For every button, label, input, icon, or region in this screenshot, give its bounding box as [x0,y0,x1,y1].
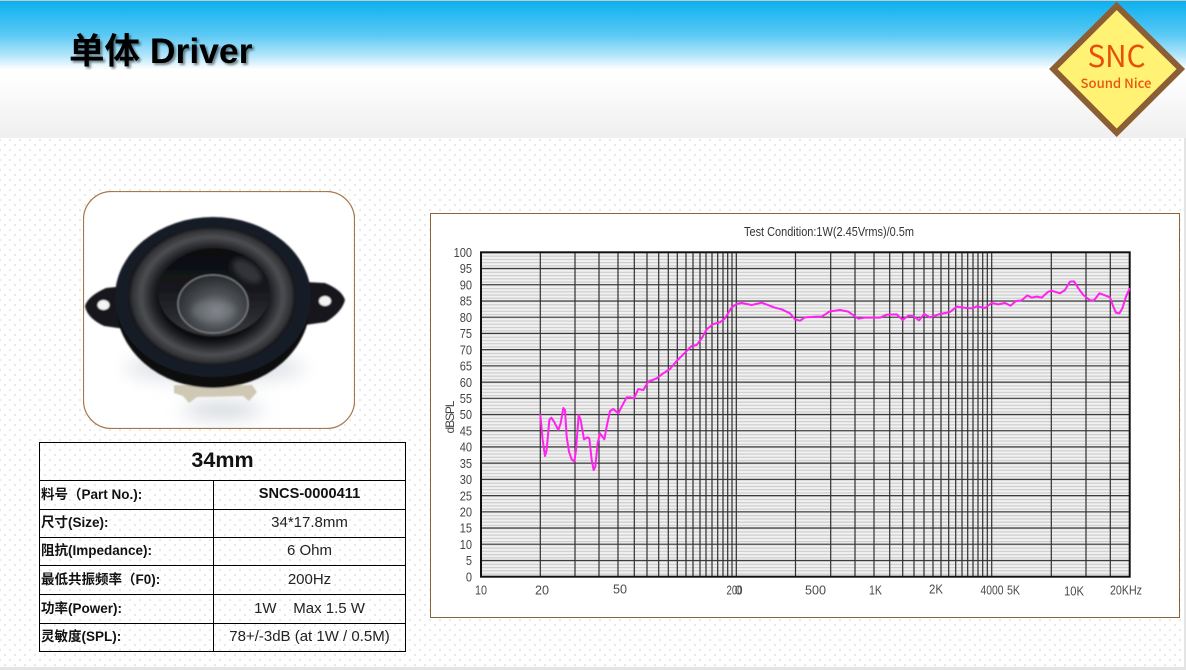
row: part number [41,486,360,502]
row: power: 1W Max 1.5 W [254,600,365,616]
x axis labels: 20KHz [1110,582,1142,598]
row: power: 功率(Power): [41,600,122,616]
y axis labels: 0 [466,570,472,585]
table heading [41,448,390,645]
row: sensitivity [41,628,390,645]
x axis labels: 1K [869,582,882,598]
y axis labels: 35 [460,456,472,471]
row: resonance: 200Hz [288,570,331,588]
table heading: 34mm [191,448,254,472]
row: power [41,600,365,616]
row: resonance: 最低共振频率（F0): [41,572,160,586]
y axis labels: 60 [460,375,472,390]
header band [0,0,1186,138]
row: part number: 料号（Part No.): [41,486,142,502]
y axis labels: 75 [460,326,472,341]
y axis labels: 95 [460,261,472,276]
logo: SNC Sound Nice [1049,2,1185,137]
row: part number: SNCS-0000411 [259,486,360,502]
y axis labels: 20 [460,505,472,520]
y axis labels: 5 [466,553,472,568]
y axis labels: 10 [460,537,472,552]
y axis labels: 65 [460,359,472,374]
row: sensitivity: 灵敏度(SPL): [41,629,121,644]
x axis labels: 2K [929,582,943,596]
photo panel: speaker driver [83,191,355,429]
x axis labels [475,582,1142,598]
logo: SNC Sound Nice: SNC [1088,32,1146,76]
x axis labels: 20 [535,582,549,598]
title: 单体 Driver [69,31,252,71]
spec table [39,442,406,652]
x axis labels: 5K [1007,582,1020,598]
y axis labels: 85 [460,294,472,309]
row: impedance: 6 Ohm [287,542,332,559]
row: size: 34*17.8mm [271,514,348,531]
y axis labels: 15 [460,521,472,536]
row: resonance [41,570,331,588]
y axis labels: 55 [460,391,472,406]
plot grid [481,252,1130,577]
x axis labels: 10K [1064,584,1084,598]
x axis labels: 50 [613,582,627,596]
y axis labels: 40 [460,440,472,455]
x axis labels: 0 [735,582,742,598]
x axis labels: 500 [805,582,826,598]
y axis labels: 70 [460,342,472,358]
row: size [41,514,348,531]
y axis labels: 80 [460,310,472,325]
x axis labels: 4000 [980,582,1004,598]
x axis labels: 10 [475,582,487,598]
chart title: Test Condition:1W(2.45Vrms)/0.5m [744,224,914,239]
y axis labels: 30 [460,472,472,487]
y axis labels: 100 [454,245,472,260]
y axis labels: 50 [460,407,472,422]
row: size: 尺寸(Size): [41,515,108,530]
logo: SNC Sound Nice: Sound Nice [1080,73,1152,92]
y axis labels: 45 [460,424,472,439]
x axis labels: 200 [726,582,742,598]
y axis labels: 25 [460,488,472,504]
row: sensitivity: 78+/-3dB (at 1W / 0.5M) [229,628,390,645]
y axis labels: 90 [460,278,472,293]
panel: frequency response chart [430,213,1180,618]
speaker body [85,217,345,403]
response curve [540,281,1129,470]
y axis labels [454,245,472,585]
y axis title: dBSPL [443,400,457,434]
row: impedance: 阻抗(Impedance): [41,543,152,558]
shadow [125,354,305,416]
row: impedance [41,542,332,559]
